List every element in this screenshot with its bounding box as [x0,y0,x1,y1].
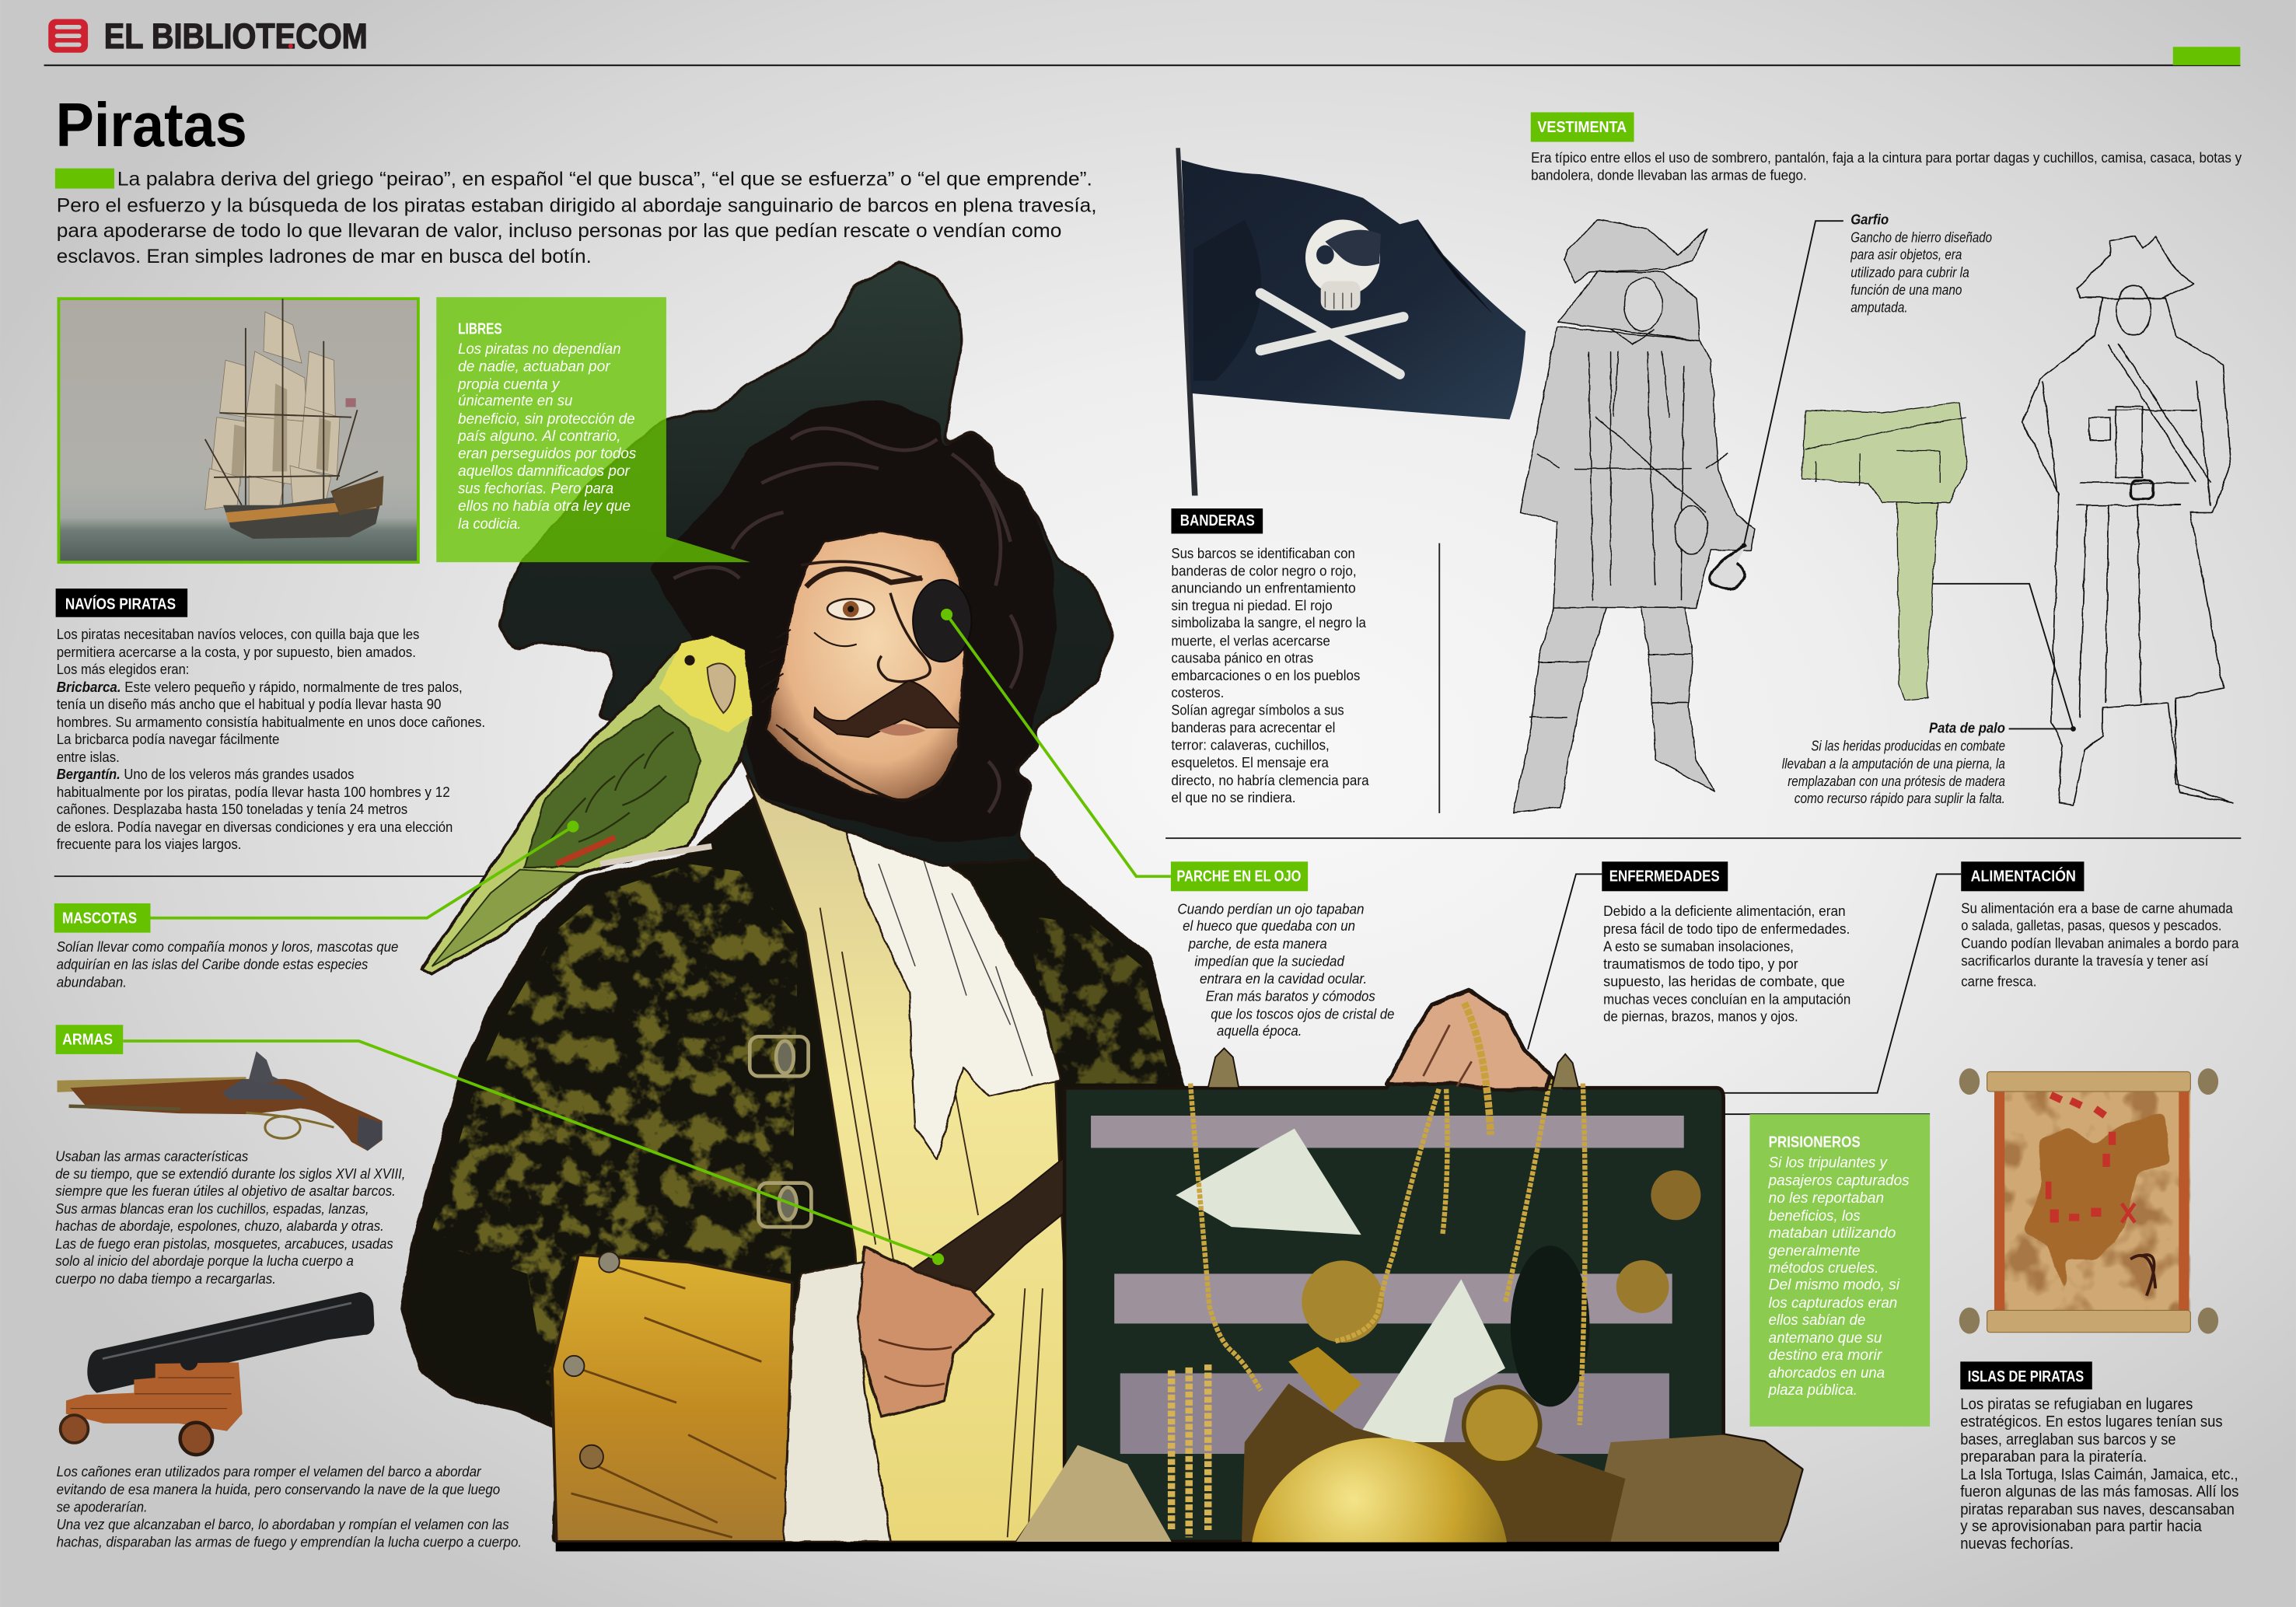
text: armas: cuerpo no daba tiempo a recargarlas. [55,1270,276,1287]
text: Islas de piratas: estratégicos. En estos lugares tenían sus [1960,1413,2223,1431]
text: cañones: Los cañones eran utilizados para romper el velamen del barco a abordar [57,1463,481,1479]
text: Islas de piratas: preparaban para la piratería. [1960,1448,2147,1466]
panel: Prisioneros: mataban utilizando [1769,1224,1896,1242]
panel: Prisioneros [1724,1113,1930,1427]
pistol in hand [893,1135,1116,1296]
lace cuff [784,1262,890,1542]
drawing: pirate captain with hook [1513,219,1755,812]
text: Banderas: simbolizaba la sangre, el negro la [1171,614,1366,631]
panel: Libres: eran perseguidos por todos [458,445,636,462]
text: Navíos piratas: entre islas. [57,749,120,765]
text: Banderas: costeros. [1171,684,1224,700]
callout: Garfio: Garfio [1850,211,1889,227]
text: Navíos piratas: cañones. Desplazaba hasta 150 toneladas y tenía 24 metros [57,801,407,817]
text: Vestimenta [1531,149,2242,183]
text: Parche en el ojo: impedían que la suciedad [1194,952,1344,969]
label: Mascotas with leader: MASCOTAS [62,910,137,927]
vest [747,776,1081,1542]
text: Navíos piratas: habitualmente por los piratas, podía llevar hasta 100 hombres y 12 [57,784,450,800]
text: Islas de piratas: Los piratas se refugiaban en lugares [1960,1396,2193,1413]
text: Alimentación: Su alimentación era a base de carne ahumada [1961,900,2233,916]
text: cañones: evitando de esa manera la huida, pero conservando la nave de la que luego [57,1481,500,1497]
callout: Pata de palo: Si las heridas producidas en combate [1811,738,2005,754]
heading: Enfermedades: ENFERMEDADES [1609,868,1720,886]
panel: Libres: la codicia. [458,515,521,533]
text: Enfermedades: presa fácil de todo tipo de enfermedades. [1603,921,1850,937]
text: Navíos piratas: tenía un diseño más ancho que el habitual y podía llevar hasta 90 [57,696,441,712]
text: Navíos piratas: hombres. Su armamento consistía habitualmente en unos doce cañones. [57,714,485,730]
text: Banderas [1171,545,1369,805]
drawing: pirate with wooden leg [2022,236,2233,805]
text: Parche en el ojo: entrara en la cavidad ocular. [1200,970,1367,987]
text: Banderas: Solían agregar símbolos a sus [1171,702,1344,718]
text: Alimentación: sacrificarlos durante la travesía y tener así [1961,952,2209,969]
heading: Vestimenta [1531,112,1634,141]
text: Mascotas: Solían llevar como compañía monos y loros, mascotas que [57,938,398,955]
text: Parche en el ojo: Cuando perdían un ojo tapaban [1177,900,1364,917]
panel: Libres: beneficio, sin protección de [458,410,635,428]
text: Navíos piratas [57,626,485,852]
text: Navíos piratas: permitiera acercarse a la costa, y por supuesto, bien amados. [57,644,416,660]
panel: Prisioneros: no les reportaban [1769,1190,1884,1207]
text: Islas de piratas: y se aprovisionaban para partir hacia [1960,1518,2203,1535]
text: Islas de piratas: bases, arreglaban sus barcos y se [1960,1431,2176,1448]
panel: Libres: propia cuenta y [457,376,561,393]
panel: Prisioneros: ahorcados en una [1769,1364,1885,1382]
text: Banderas: muerte, el verlas acercarse [1171,632,1330,648]
panel: Prisioneros: antemano que su [1769,1329,1882,1347]
label: Parche en el ojo with leader [941,609,1308,891]
text: cañones: hachas, disparaban las armas de fuego y emprendían la lucha cuerpo a cuerpo. [57,1533,522,1549]
heading: Vestimenta: VESTIMENTA [1537,119,1627,136]
text: Navíos piratas: Los piratas necesitaban navíos veloces, con quilla baja que les [57,626,419,642]
panel: Prisioneros: destino era morir [1769,1347,1883,1364]
text: Vestimenta: bandolera, donde llevaban las armas de fuego. [1531,166,1807,183]
text: Banderas: esqueletos. El mensaje era [1171,754,1329,770]
callout: Pata de palo [1782,584,2076,806]
label: Armas with leader [56,1025,944,1265]
panel: Prisioneros: plaza pública. [1768,1382,1857,1399]
callout: Garfio: amputada. [1850,299,1908,316]
intro paragraph: esclavos. Eran simples ladrones de mar en busca del botín. [57,246,592,267]
text: Banderas: Sus barcos se identificaban con [1171,545,1355,561]
cravat [748,774,1061,1159]
text: Alimentación: o salada, galletas, pasas, quesos y pescados. [1961,917,2221,934]
callout: Garfio: utilizado para cubrir la [1850,264,1969,280]
title: Piratas [56,90,247,159]
icon: treasure map scroll [1959,1068,2218,1334]
text: Mascotas [57,938,398,990]
text: Islas de piratas: nuevas fechorías. [1960,1535,2074,1553]
text: armas: solo al inicio del abordaje porque la lucha cuerpo a [55,1252,354,1269]
hat and hair [500,264,1112,864]
photo: sailing ship [58,299,418,562]
text: Navíos piratas: La bricbarca podía navegar fácilmente [57,731,279,747]
ground bar [556,1542,1779,1551]
heading: Banderas: BANDERAS [1180,512,1255,529]
intro paragraph: Pero el esfuerzo y la búsqueda de los piratas estaban dirigido al abordaje sanguinario de barcos en plena travesía, [57,194,1097,216]
callout: Garfio: Gancho de hierro diseñado [1850,229,1992,246]
panel: Prisioneros: beneficios, los [1769,1207,1861,1224]
panel: Libres: de nadie, actuaban por [458,358,611,375]
panel: Prisioneros: Si los tripulantes y [1769,1155,1888,1172]
panel: Prisioneros: ellos sabían de [1769,1312,1865,1329]
icon: cannon [61,1292,374,1455]
callout: Pata de palo: como recurso rápido para suplir la falta. [1795,790,2005,806]
treasure chest [1016,990,1802,1607]
intro paragraph: para apoderarse de todo lo que llevaran de valor, incluso personas por las que pedían rescate o vendían como [57,220,1061,242]
text: Banderas: el que no se rindiera. [1171,789,1296,805]
panel: Libres: únicamente en su [458,393,572,410]
text: Parche en el ojo: Eran más baratos y cómodos [1206,988,1375,1004]
heading: Islas de piratas: ISLAS DE PIRATAS [1968,1368,2084,1385]
panel: Libres: país alguno. Al contrario, [457,428,621,445]
text: Navíos piratas: Bricbarca. Este velero pequeño y rápido, normalmente de tres palos, [57,679,463,695]
label: Armas with leader: ARMAS [62,1032,113,1049]
text: Alimentación: Cuando podían llevaban animales a bordo para [1961,935,2239,951]
parrot [421,635,753,973]
hand [855,1246,994,1417]
text: Islas de piratas: La Isla Tortuga, Islas Caimán, Jamaica, etc., [1960,1466,2238,1483]
intro paragraph: La palabra deriva del griego “peirao”, en español “el que busca”, “el que se esfuerza” o “el que emprende”. [117,168,1092,190]
text: Parche en el ojo: el hueco que quedaba con un [1183,917,1355,934]
text: Parche en el ojo [1177,900,1394,1039]
panel: Prisioneros: Del mismo modo, si [1769,1277,1900,1294]
text: armas: siempre que les fueran útiles al objetivo de asaltar barcos. [55,1183,396,1199]
text: Navíos piratas: Los más elegidos eran: [57,661,189,677]
callout: Garfio: para asir objetos, era [1850,246,1962,263]
text: Enfermedades: A esto se sumaban insolaciones, [1603,938,1794,954]
text: Parche en el ojo: parche, de esta manera [1188,935,1327,952]
face [759,531,971,801]
text: Navíos piratas: de eslora. Podía navegar en diversas condiciones y era una elección [57,819,453,835]
coat frogs and buttons [750,1036,811,1227]
panel: Prisioneros: métodos crueles. [1769,1259,1878,1277]
text: Enfermedades: traumatismos de todo tipo, y por [1603,955,1798,972]
panel: Prisioneros: generalmente [1769,1242,1861,1259]
text: Enfermedades: supuesto, las heridas de combate, que [1603,973,1845,989]
text: Enfermedades: Debido a la deficiente alimentación, eran [1603,903,1846,919]
header logo: EL BIBLIOTECOM [104,16,368,56]
panel: Prisioneros: PRISIONEROS [1769,1134,1861,1151]
text: Navíos piratas: frecuente para los viajes largos. [57,836,241,852]
text: armas: Las de fuego eran pistolas, mosquetes, arcabuces, usadas [55,1235,393,1252]
text: armas [55,1148,405,1287]
hand holding gold [1386,990,1550,1134]
heading: Islas de piratas [1960,1361,2092,1389]
text: armas: Sus armas blancas eran los cuchillos, espadas, lanzas, [55,1200,369,1217]
panel: Libres [436,297,750,562]
text: Banderas: directo, no habría clemencia para [1171,772,1369,788]
text: cañones: Una vez que alcanzaban el barco, lo abordaban y rompían el velamen con las [57,1516,509,1532]
text: armas: de su tiempo, que se extendió durante los siglos XVI al XVIII, [55,1165,405,1182]
heading: Enfermedades [1528,861,1728,1050]
panel: Libres: aquellos damnificados por [458,463,631,480]
text: Mascotas: adquirían en las islas del Caribe donde estas especies [57,956,369,973]
text: Banderas: causaba pánico en otras [1171,649,1313,666]
text: armas: hachas de abordaje, espolones, chuzo, alabarda y otras. [55,1217,384,1234]
text: Mascotas: abundaban. [57,973,127,990]
panel: Libres: Los piratas no dependían [458,341,621,358]
text: Banderas: banderas de color negro o rojo, [1171,562,1357,578]
panel: Prisioneros: los capturados eran [1769,1294,1897,1312]
text: Enfermedades [1603,903,1850,1025]
photo: pirate flag [1176,148,1525,495]
label: Mascotas with leader [54,821,579,933]
text: Islas de piratas [1960,1396,2239,1553]
header green tab [2173,47,2240,65]
callout: Pata de palo: remplazaban con una prótesis de madera [1788,773,2005,789]
text: Navíos piratas: Bergantín. Uno de los veleros más grandes usados [57,766,354,782]
panel: Prisioneros: pasajeros capturados [1768,1172,1910,1190]
callout: Garfio [1742,211,1992,548]
text: armas: Usaban las armas características [55,1148,249,1164]
heading: Navíos piratas [56,589,187,617]
text: Banderas: banderas para acrecentar el [1171,719,1335,735]
text: Islas de piratas: piratas reparaban sus naves, descansaban [1960,1501,2235,1518]
label: Parche en el ojo with leader: PARCHE EN EL OJO [1176,868,1301,885]
callout: Pata de palo: llevaban a la amputación de una pierna, la [1782,755,2005,771]
callout: Pata de palo: Pata de palo [1929,719,2005,735]
text: Parche en el ojo: que los toscos ojos de cristal de [1211,1005,1394,1022]
heading: Alimentación [1724,861,2084,1093]
heading: Banderas [1171,508,1263,533]
text: cañones [57,1463,522,1549]
text: Banderas: embarcaciones o en los pueblos [1171,667,1360,683]
text: Enfermedades: de piernas, brazos, manos y ojos. [1603,1008,1798,1025]
text: Parche en el ojo: aquella época. [1217,1022,1302,1039]
panel: Libres: sus fechorías. Pero para [458,480,613,498]
panel: Libres: LIBRES [458,320,502,337]
text: Alimentación [1961,900,2239,989]
text: Enfermedades: muchas veces concluían en la amputación [1603,990,1850,1007]
pirate illustration [401,264,1802,1607]
heading: Navíos piratas: NAVÍOS PIRATAS [65,595,176,613]
text: Banderas: sin tregua ni piedad. El rojo [1171,597,1333,613]
text: Banderas: anunciando un enfrentamiento [1171,579,1356,596]
intro paragraph [55,168,1097,267]
sleeve cuff [552,1255,792,1542]
callout: Garfio: función de una mano [1850,281,1962,298]
heading: Alimentación: ALIMENTACIÓN [1971,867,2076,886]
text: Alimentación: carne fresca. [1961,973,2036,989]
text: Banderas: terror: calaveras, cuchillos, [1171,736,1330,753]
drawing: peg leg [1802,403,1967,700]
panel: Libres: ellos no había otra ley que [458,498,631,515]
text: cañones: se apoderarían. [57,1498,148,1514]
icon: flintlock pistol [58,1051,383,1151]
text: Islas de piratas: fueron algunas de las más famosas. Allí los [1960,1483,2239,1500]
pirate coat [401,791,1193,1542]
